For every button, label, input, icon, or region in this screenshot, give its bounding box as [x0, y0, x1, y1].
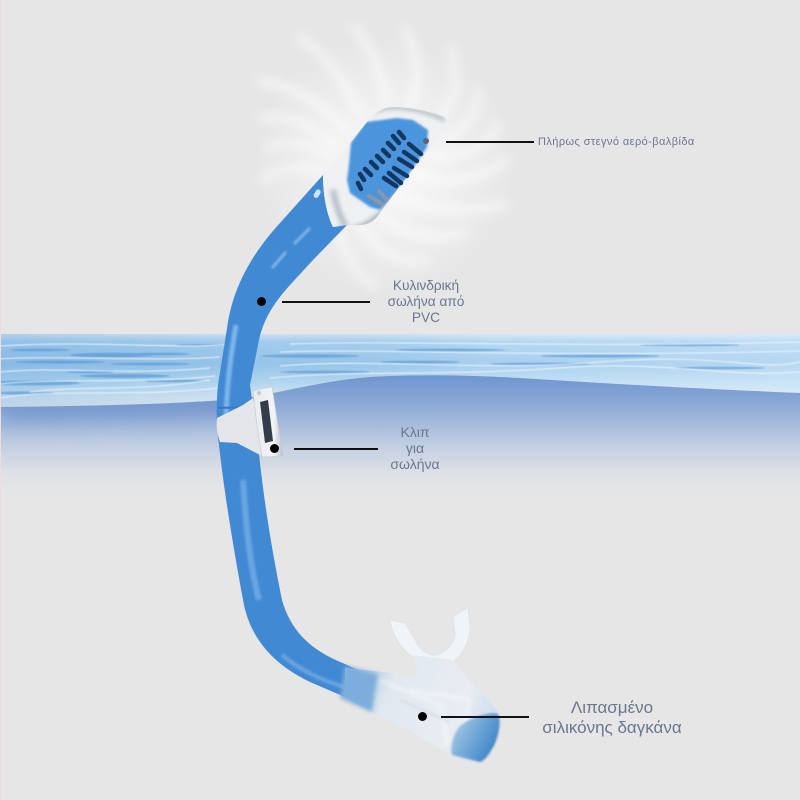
- label: clip: [390, 424, 440, 472]
- label: tube: PVC: [412, 310, 440, 325]
- label: tube: σωλήνα από: [388, 294, 464, 309]
- label: clip: σωλήνα: [390, 456, 440, 472]
- underwater gradient: [1, 375, 800, 474]
- left edge tint: [0, 0, 1, 800]
- marker: tube: [257, 297, 266, 306]
- snorkel tube: [217, 175, 380, 697]
- callout: tube: [282, 301, 370, 302]
- callout: air valve: [446, 141, 534, 142]
- label: mouthpiece: [542, 698, 682, 736]
- label: clip: για: [406, 440, 424, 456]
- label: air valve: Πλήρως στεγνό αερό-βαλβίδα: [538, 136, 695, 148]
- label: tube: [388, 278, 464, 325]
- valve hole: [423, 138, 429, 144]
- label: clip: Κλιπ: [400, 424, 430, 440]
- silicone mouthpiece: [340, 607, 500, 762]
- marker: clip: [270, 444, 279, 453]
- tube clip: [217, 387, 283, 457]
- label: mouthpiece: Λιπασμένο: [571, 698, 653, 717]
- marker: mouthpiece: [418, 712, 427, 721]
- white air burst around valve: [255, 28, 515, 295]
- vent slots: [358, 132, 421, 189]
- label: mouthpiece: σιλικόνης δαγκάνα: [542, 718, 682, 736]
- label: tube: Κυλινδρική: [393, 278, 459, 293]
- callout: mouthpiece: [441, 716, 529, 718]
- air valve head: [313, 107, 447, 229]
- side marker: [313, 189, 322, 199]
- open sea surface band: [0, 334, 800, 409]
- callout: clip: [294, 448, 378, 450]
